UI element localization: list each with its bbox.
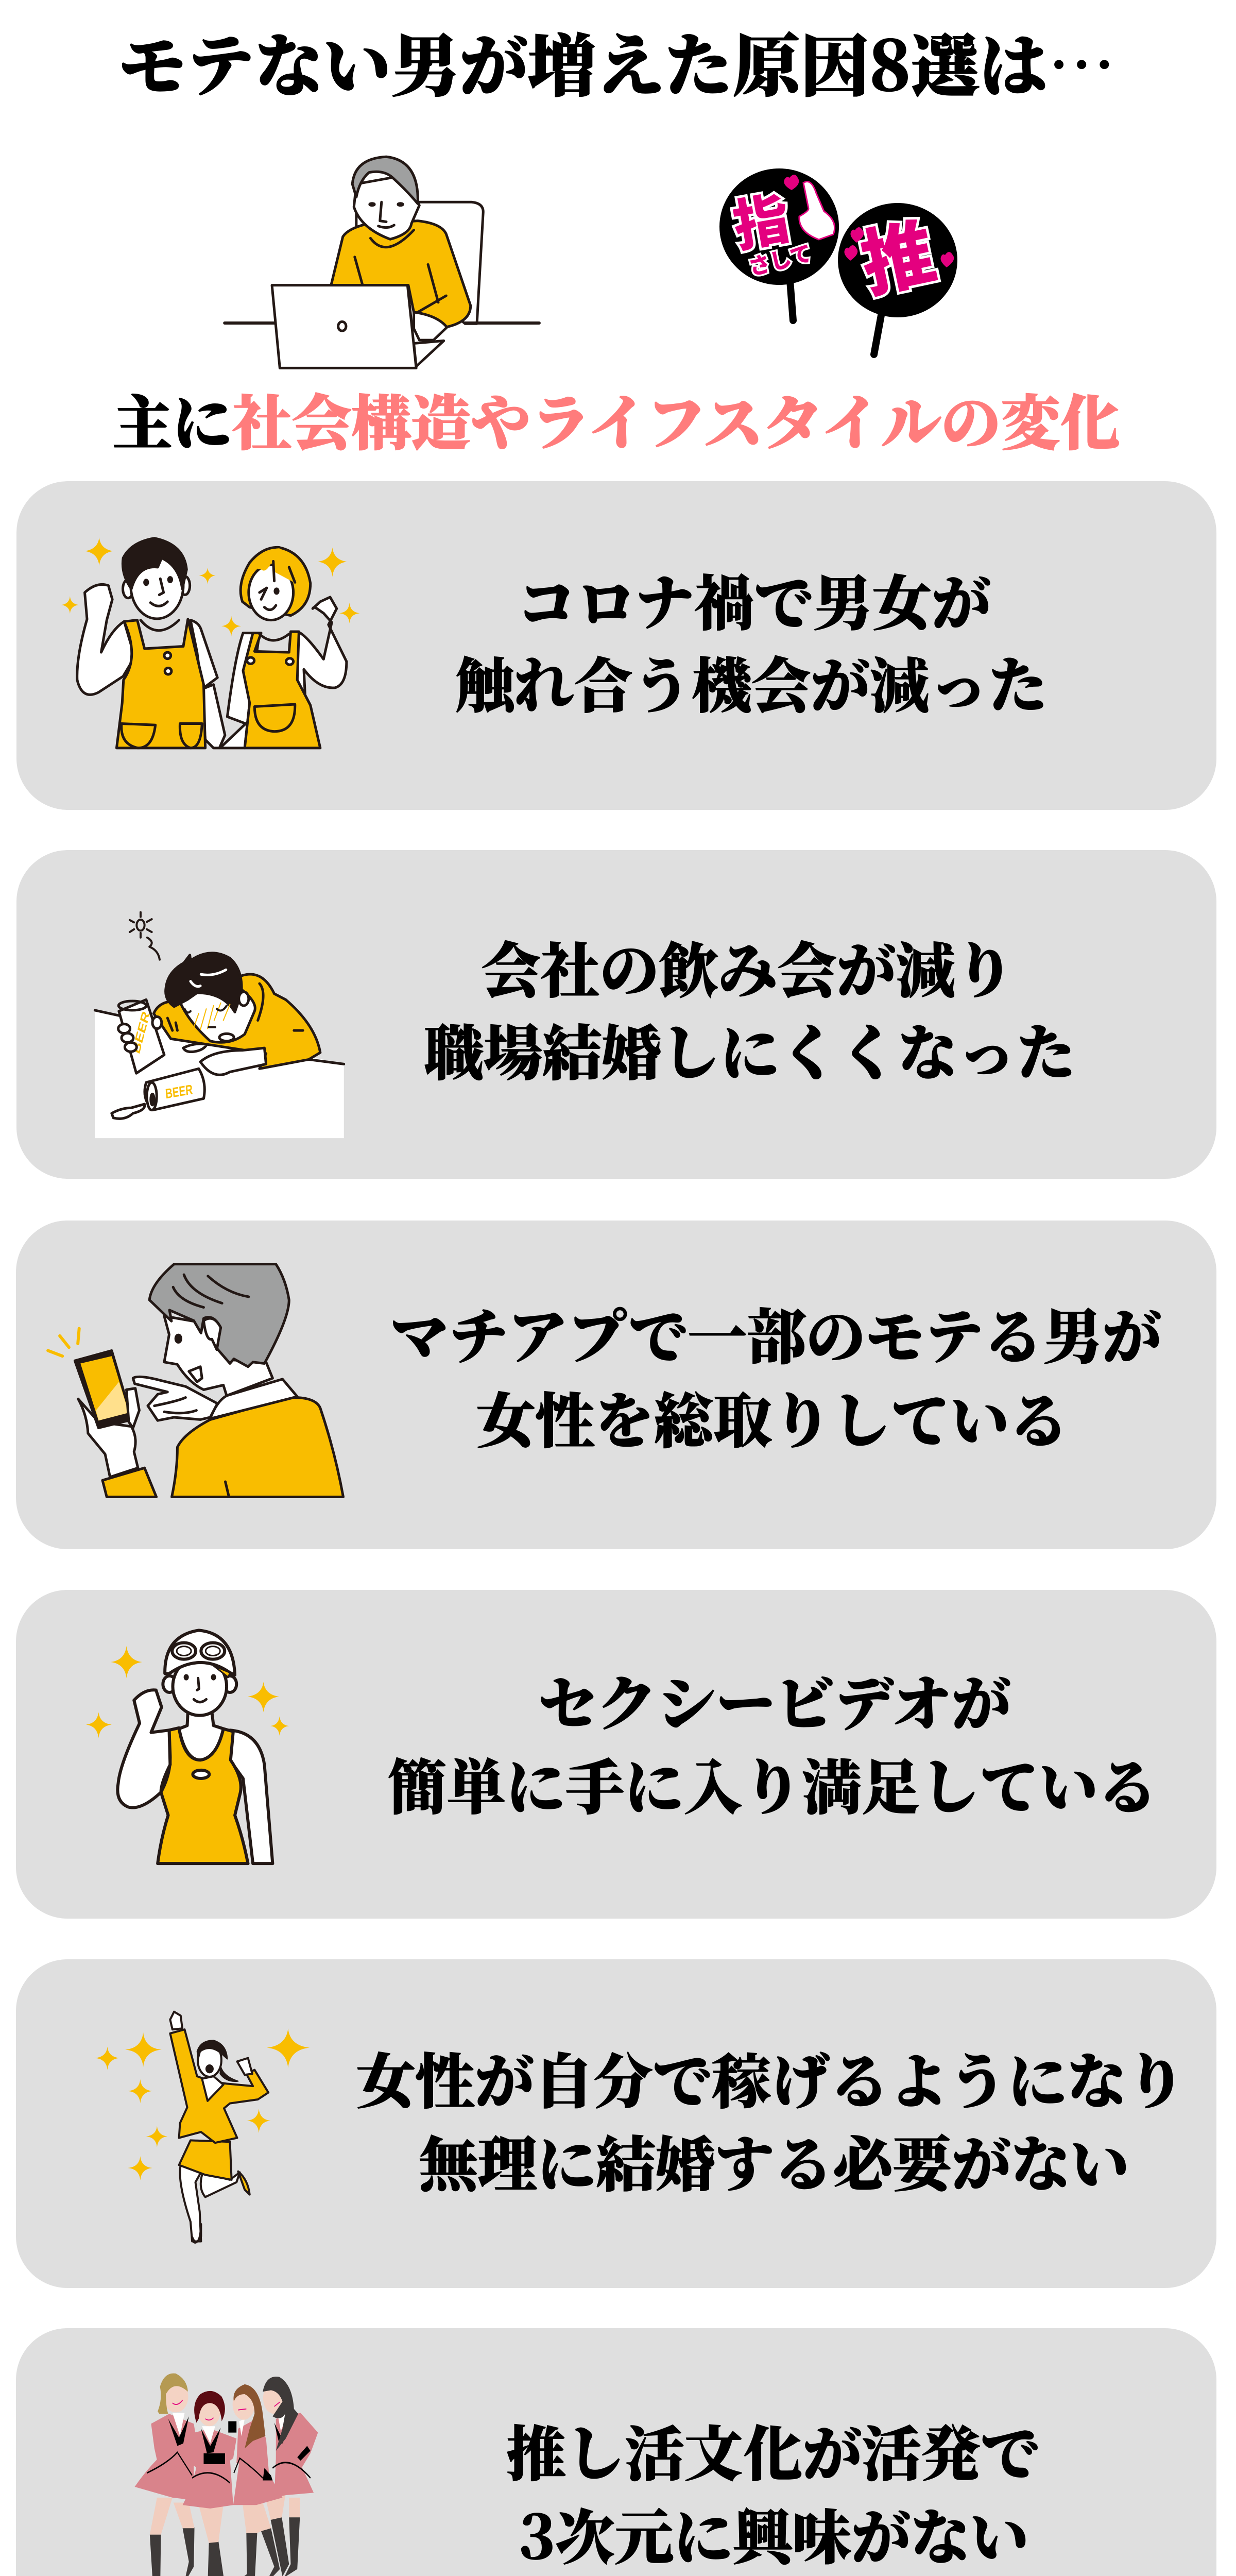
icon: idol group [134, 2374, 318, 2576]
text: card 3 [390, 1290, 1161, 1459]
text: card 1: 触れ合う機会が減った [455, 639, 1048, 724]
text: card 3: 女性を総取りしている [476, 1374, 1069, 1459]
icon: drunk man with beer: BEER [165, 1081, 193, 1101]
text: card 3: マチアプで一部のモテる男が [390, 1290, 1161, 1375]
panel: card 4 [16, 1590, 1216, 1919]
text: card 1 [455, 556, 1048, 724]
icon: man at laptop [225, 157, 539, 368]
panel: card 2 [16, 850, 1216, 1179]
icon: fan 指さして: さして [745, 236, 815, 282]
text: card 6: 3次元に興味がない [519, 2490, 1029, 2575]
icon: swimmer [86, 1630, 289, 1863]
panel: card 6 [16, 2328, 1216, 2576]
subtitle: 主に社会構造やライフスタイルの変化 [113, 376, 1120, 461]
text: card 4 [387, 1657, 1158, 1825]
icon: fan 推: 推 [850, 193, 944, 312]
icon: drunk man with beer: BEER [130, 1009, 152, 1056]
text: card 5 [356, 2035, 1186, 2202]
icon: fan 指さして [719, 168, 839, 320]
text: card 2: 会社の飲み会が減り [481, 924, 1015, 1009]
icon: drunk man with beer [95, 912, 344, 1138]
text: card 4: セクシービデオが [538, 1657, 1011, 1742]
panel: card 5 [16, 1959, 1216, 2288]
icon: couple in aprons [61, 537, 359, 748]
text: card 4: 簡単に手に入り満足している [387, 1740, 1158, 1825]
icon: man pointing at smartphone [48, 1264, 344, 1497]
icon: fan 推 [838, 193, 957, 354]
text: card 2 [424, 924, 1076, 1091]
title: モテない男が増えた原因8選は… [118, 13, 1115, 110]
panel: card 3 [16, 1221, 1216, 1549]
icon: fan 指さして: 指 [726, 174, 795, 263]
text: card 6 [506, 2407, 1040, 2575]
text: card 5: 無理に結婚する必要がない [419, 2117, 1129, 2202]
text: card 2: 職場結婚しにくくなった [424, 1006, 1076, 1091]
icon: jumping businesswoman [95, 2012, 310, 2243]
text: card 1: コロナ禍で男女が [517, 556, 991, 641]
text: card 5: 女性が自分で稼げるようになり [356, 2035, 1186, 2120]
panel: card 1 [16, 481, 1216, 810]
text: card 6: 推し活文化が活発で [506, 2407, 1040, 2492]
